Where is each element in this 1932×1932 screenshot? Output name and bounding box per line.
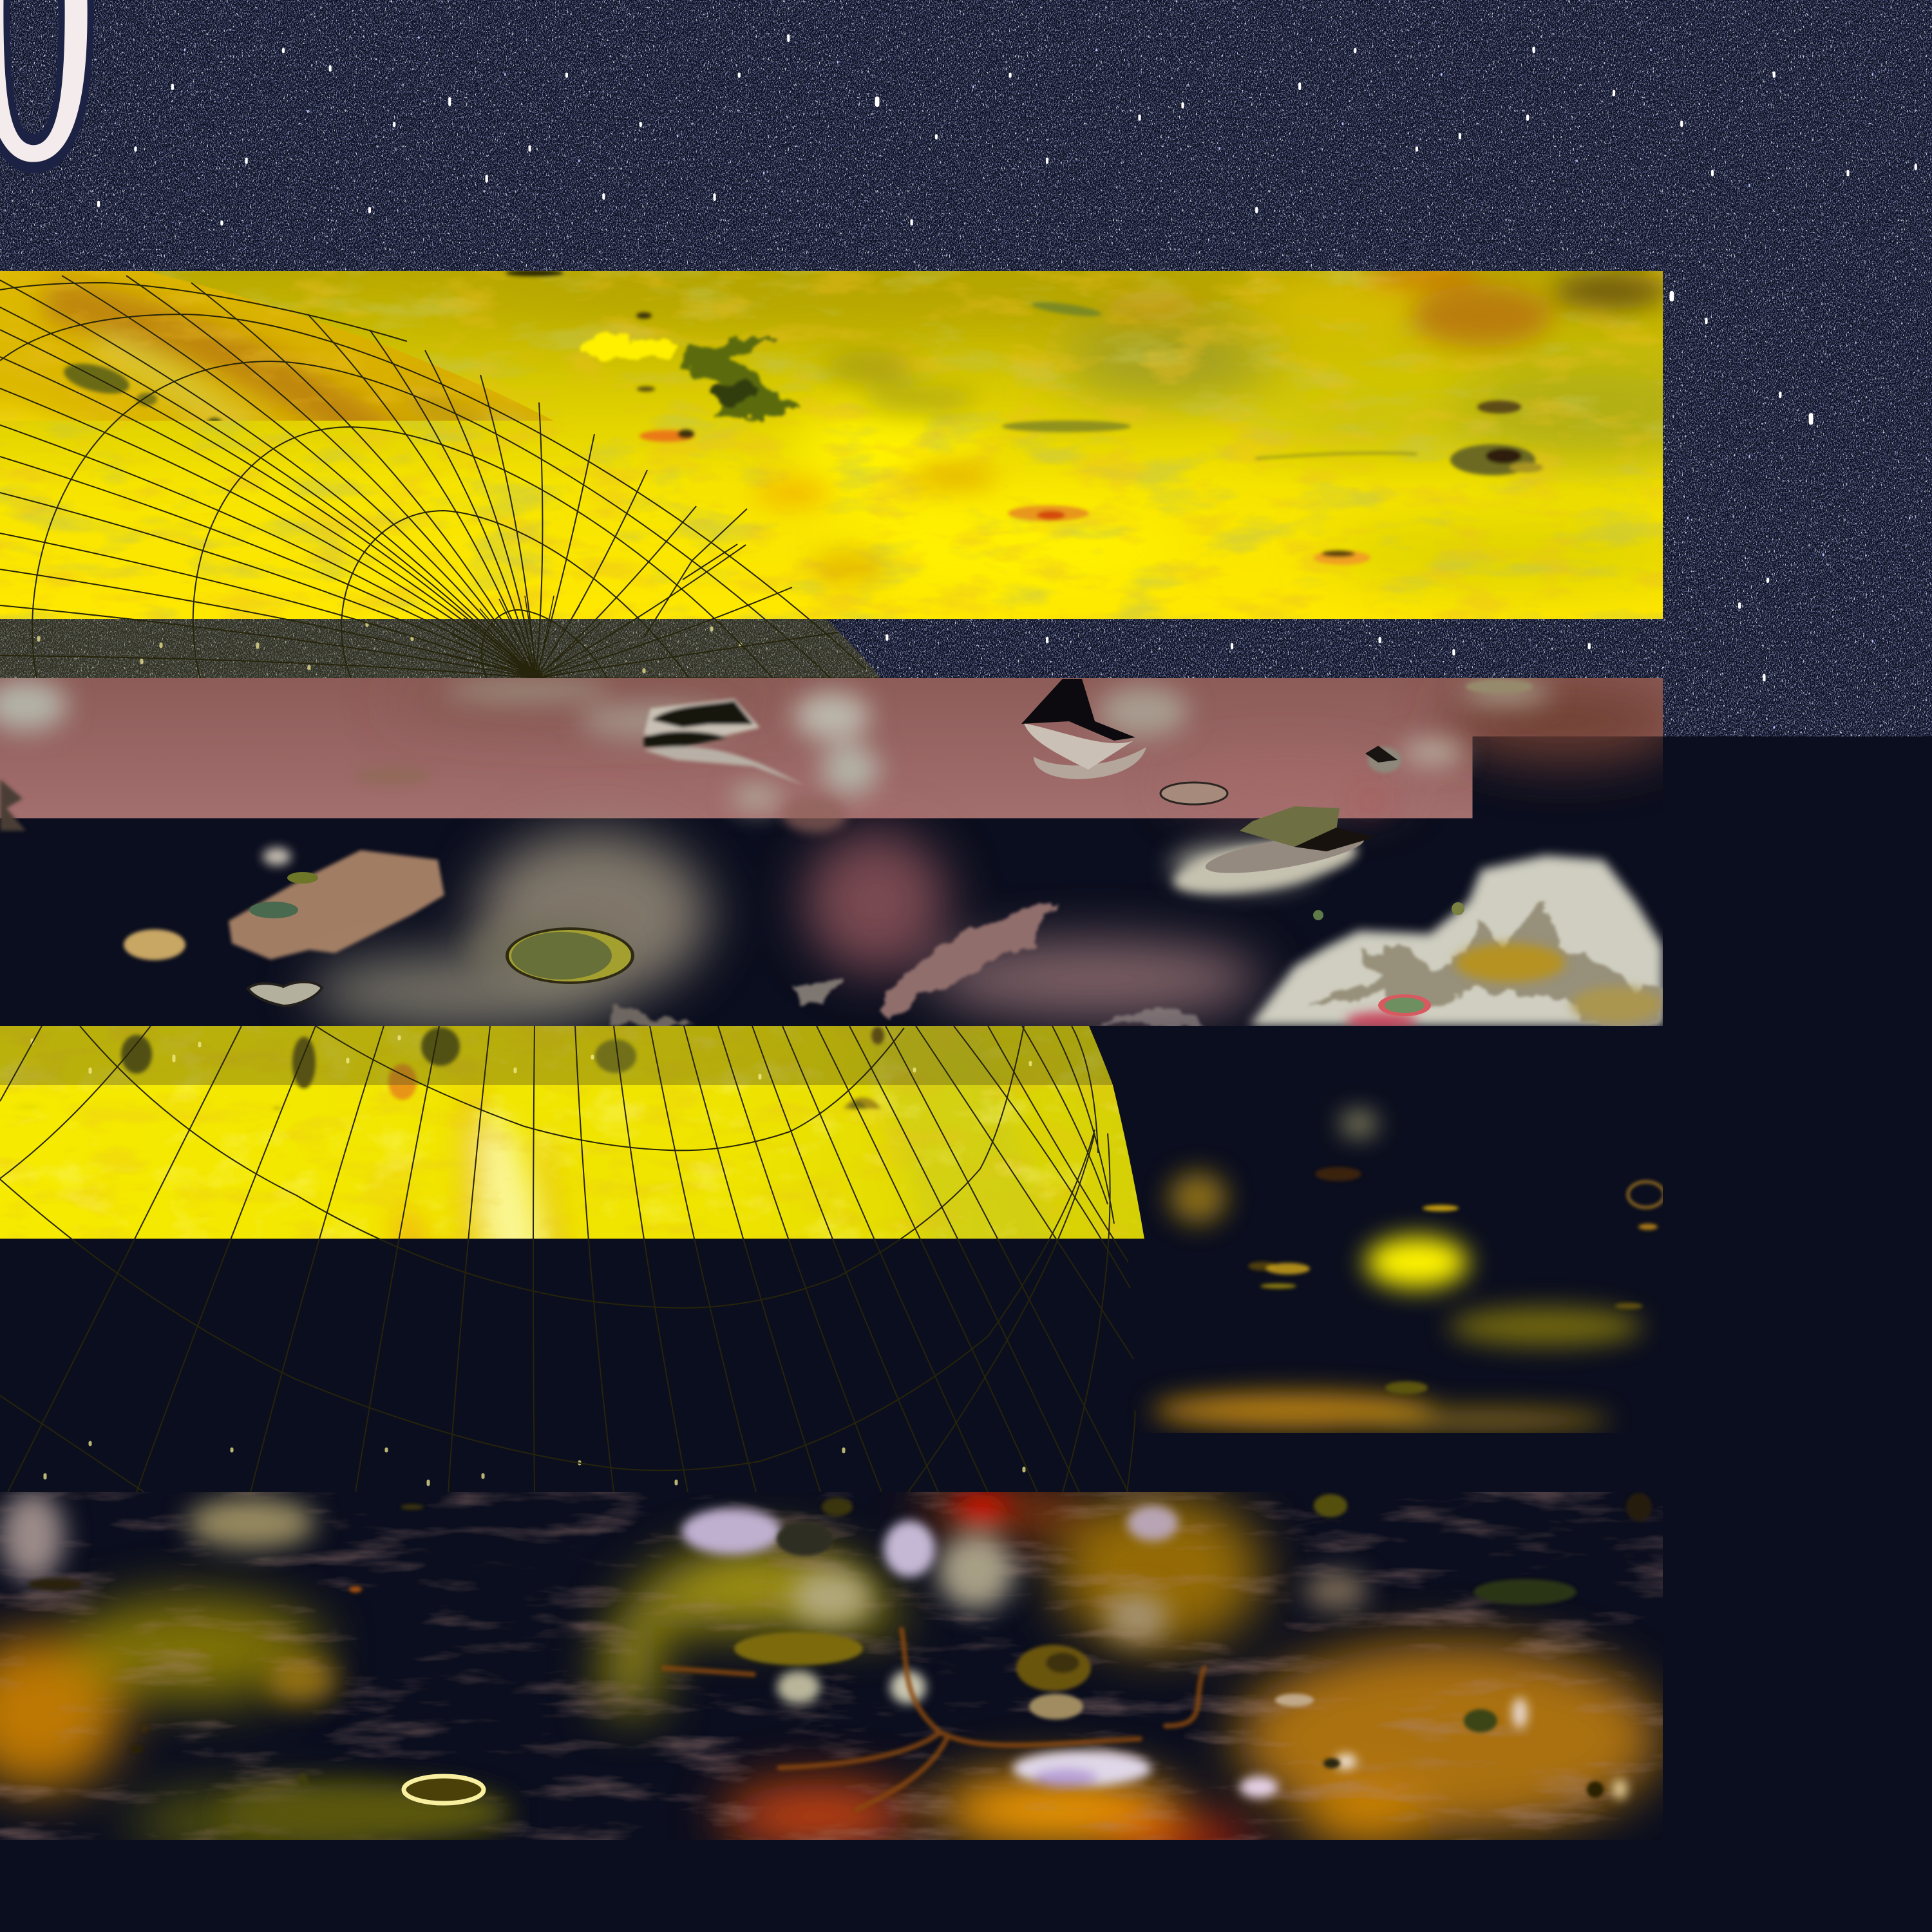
panel: brown surface band 5 <box>1030 1899 1663 1932</box>
icon: crater with bright ring <box>404 1776 484 1803</box>
icon: olive lake with striped flow <box>1170 806 1375 904</box>
panel: golden Io surface band 4 <box>0 1491 1663 1860</box>
colour washes <box>0 1493 1662 1860</box>
globe grid lines: middle <box>0 1026 1135 1492</box>
icon: volcanic spots on globe <box>61 358 804 680</box>
icon: green lava patch <box>580 332 792 420</box>
icon: vein channels <box>663 1629 1204 1810</box>
icon: tan lakes and small calderas <box>124 767 847 960</box>
icon: black triangular volcano <box>1021 679 1146 779</box>
globe grid lines: lower <box>33 1840 1043 1932</box>
panel: yellow Io surface band 3 <box>966 1085 1664 1433</box>
dim translucent strips <box>0 1026 1224 1085</box>
globe: upper grid section <box>0 258 966 680</box>
white lava field <box>1249 855 1663 1026</box>
pale plumes <box>0 679 1675 886</box>
dim translucent strip <box>0 619 966 678</box>
icon: small dark rocks <box>1160 679 1533 920</box>
icon: red ringed lake <box>1346 994 1431 1030</box>
globe: middle grid section <box>0 1026 1224 1507</box>
icon: large crater <box>470 919 634 984</box>
icon: black volcano left <box>0 699 805 831</box>
globe: lower grid section <box>0 1840 1159 1932</box>
icon: heart shaped caldera <box>248 982 322 1006</box>
icon: lavender deposits <box>681 1505 1627 1799</box>
globe grid lines: upper <box>0 276 881 678</box>
panel: mauve Io surface band 2 <box>0 678 1687 1030</box>
panel: yellow Io surface band 1 <box>0 267 1732 619</box>
icon: surface spots band 3 <box>1248 1167 1664 1394</box>
icon: surface spots band 1 <box>506 270 1543 565</box>
icon: dark gray flows <box>612 902 1211 1026</box>
icon: dark surface features <box>28 1493 1652 1798</box>
icon: volcanic spots on middle globe <box>6 1027 1066 1419</box>
